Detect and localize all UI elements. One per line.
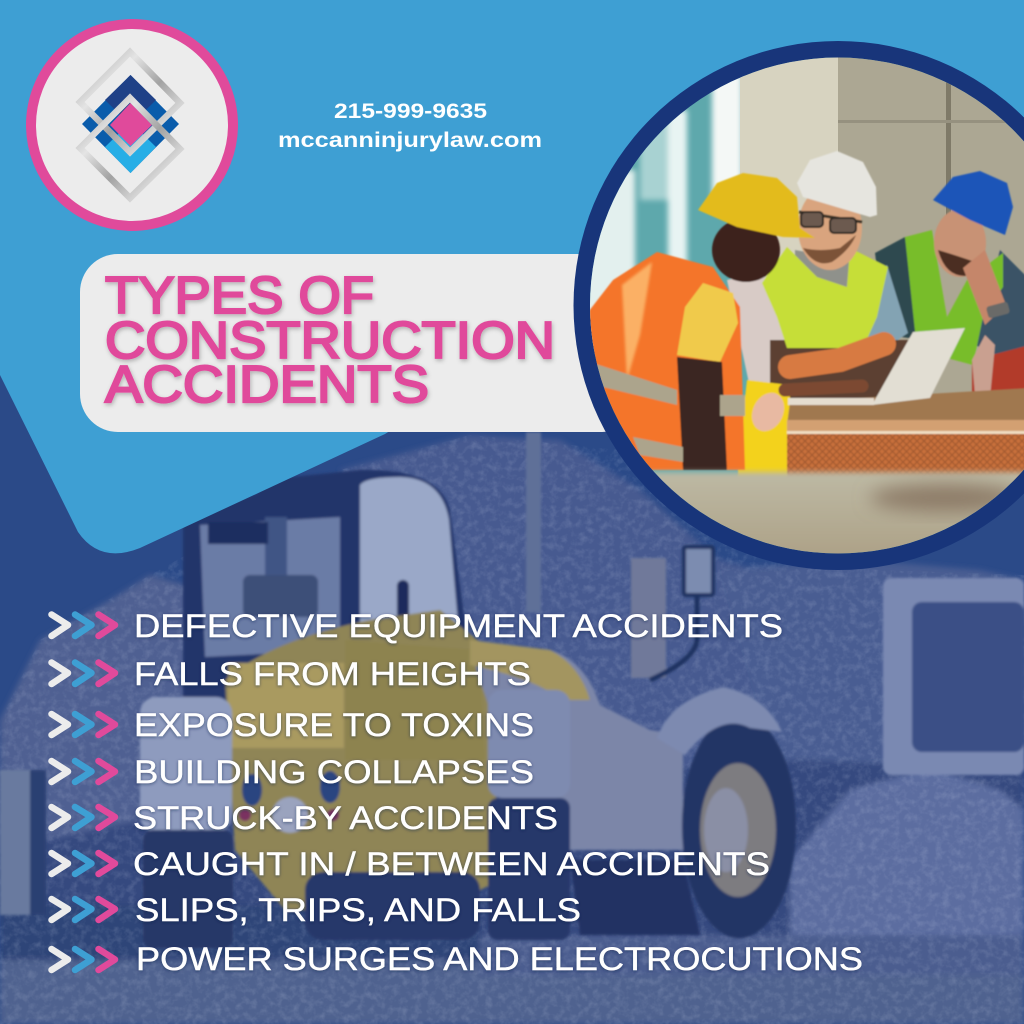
list item 6: CAUGHT IN / BETWEEN ACCIDENTS [133, 846, 770, 882]
circular photo: three construction workers with laptop [560, 40, 1024, 582]
title text: ACCIDENTS [105, 356, 429, 414]
logo badge [31, 24, 233, 226]
logo: silver frames [80, 52, 180, 198]
worker: left, yellow helmet and orange vest [582, 173, 815, 470]
list item 7: SLIPS, TRIPS, AND FALLS [135, 892, 581, 928]
contact details: 215-999-9635 [334, 100, 487, 123]
list item 2: FALLS FROM HEIGHTS [134, 656, 531, 692]
list of accident types [52, 608, 863, 977]
list item 8: POWER SURGES AND ELECTROCUTIONS [136, 941, 863, 977]
title text: CONSTRUCTION [105, 312, 555, 370]
contact details [278, 100, 542, 152]
worker: centre, white helmet [727, 151, 910, 478]
blurred foreground [651, 468, 1024, 554]
list item 4: BUILDING COLLAPSES [134, 754, 534, 790]
blue header shape [0, 0, 1024, 553]
logo: colored diamond [82, 75, 179, 173]
cab frame [183, 470, 478, 720]
list item 5: STRUCK-BY ACCIDENTS [133, 800, 558, 836]
table and laptop [787, 328, 1024, 482]
front wheel [682, 714, 796, 938]
worker: right, blue helmet [875, 171, 1024, 370]
background photo: wheel loader on construction site [0, 432, 1024, 1024]
list item 1: DEFECTIVE EQUIPMENT ACCIDENTS [134, 608, 783, 644]
loader arm and front body [470, 650, 683, 850]
loader rear body [225, 610, 500, 910]
contact details: mccanninjurylaw.com [278, 129, 542, 152]
title text [105, 267, 555, 414]
title text: TYPES OF [105, 267, 374, 325]
list item 3: EXPOSURE TO TOXINS [134, 707, 534, 743]
title pill [80, 254, 640, 432]
